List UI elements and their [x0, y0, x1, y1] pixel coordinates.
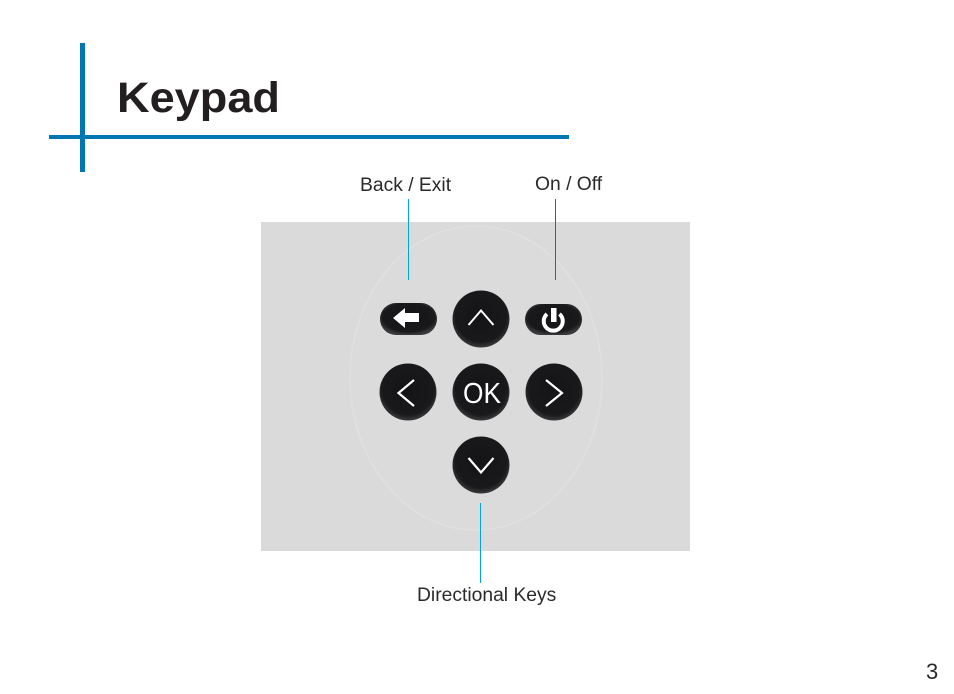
- button: back: [380, 303, 437, 335]
- button: power: [525, 304, 582, 335]
- keypad photo panel: [261, 222, 690, 551]
- button: OK: [452, 364, 510, 420]
- title accent lines: [49, 43, 569, 172]
- leader line: Directional Keys: [480, 503, 481, 583]
- leader line: On / Off: [555, 199, 556, 280]
- button: right: [526, 364, 582, 420]
- title: Keypad: [117, 74, 280, 122]
- page number: 3: [926, 659, 938, 684]
- label: Back / Exit: Back / Exit: [360, 175, 452, 196]
- label: Directional Keys: Directional Keys: [417, 585, 556, 606]
- label: On / Off: On / Off: [535, 174, 603, 195]
- button: left: [380, 364, 436, 420]
- leader line: Back / Exit: [408, 199, 409, 280]
- button: OK: OK: [463, 378, 502, 410]
- button: up: [452, 290, 510, 348]
- button: down: [452, 436, 510, 494]
